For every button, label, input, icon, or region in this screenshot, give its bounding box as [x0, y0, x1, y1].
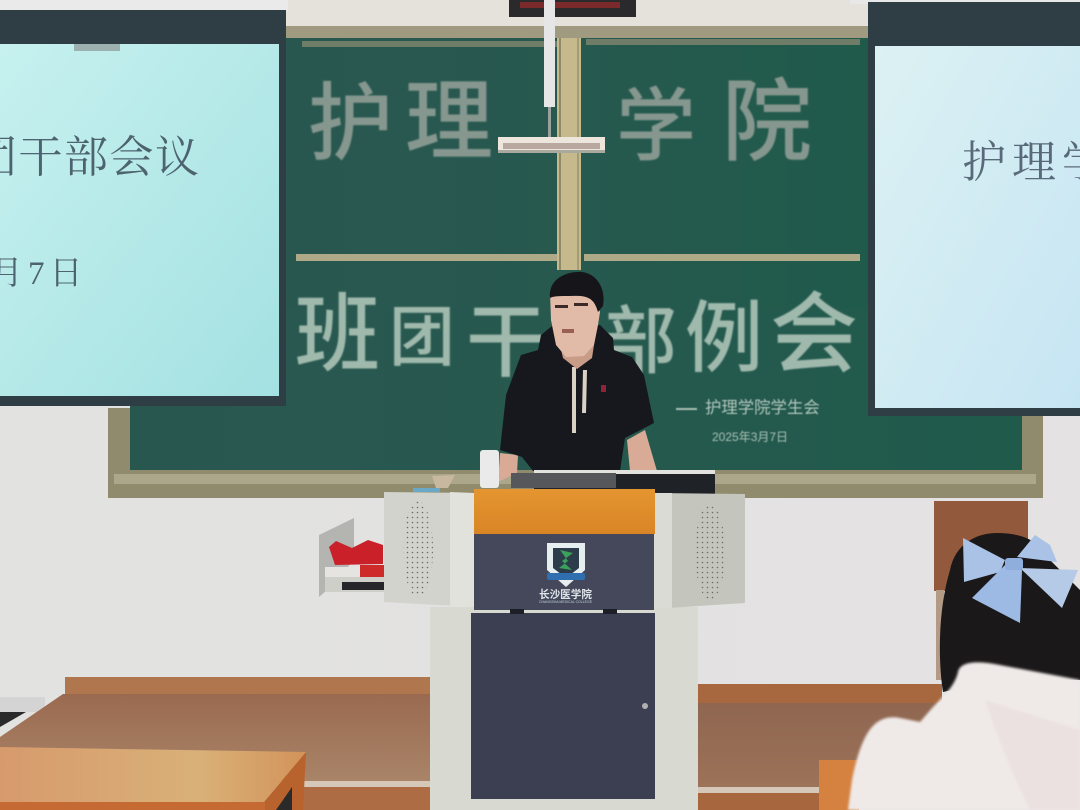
- audience student: [848, 533, 1080, 810]
- chalk heading: class cadre meeting: 例: [685, 294, 763, 382]
- chalk signature: 护理学院学生会: [705, 399, 820, 417]
- chalk heading: class cadre meeting: [295, 285, 858, 387]
- presenter hoodie: [500, 325, 654, 471]
- presenter hair: [550, 272, 604, 312]
- lectern: [384, 489, 745, 810]
- chalk heading: class cadre meeting: 部: [603, 300, 677, 383]
- presenter face: [550, 288, 600, 357]
- chalk heading: nursing college: 学: [616, 82, 696, 171]
- presenter: [498, 272, 657, 482]
- blackboard lower frame: [108, 408, 1043, 498]
- lectern navy panel: [474, 534, 654, 614]
- chalk date: 2025年3月7日: [712, 430, 788, 444]
- presenter forearms: [498, 430, 657, 482]
- chalk heading: class cadre meeting: 干: [466, 298, 546, 387]
- skirting wood: [65, 677, 942, 703]
- monitor: [511, 470, 715, 494]
- fleece pink tint: [985, 700, 1080, 810]
- chalk heading: class cadre meeting: 团: [389, 300, 455, 374]
- water bottle: [480, 450, 499, 488]
- blackboard: [130, 38, 1022, 470]
- chalk heading: class cadre meeting: 班: [295, 288, 380, 383]
- presenter neck: [560, 345, 594, 369]
- lectern door: [471, 613, 655, 799]
- presenter eyes and mouth: [555, 303, 588, 333]
- blackboard upper frame: [285, 26, 875, 38]
- chalk heading: nursing college: 护: [308, 77, 393, 172]
- ceiling projector mount: [498, 0, 605, 153]
- college badge: [547, 543, 585, 587]
- left projection screen: [0, 0, 288, 406]
- hoodie strings: [572, 367, 587, 433]
- foreground desk left: [0, 747, 306, 810]
- wooden panel right: [934, 501, 1028, 680]
- door handle: [642, 703, 648, 709]
- chalk heading: class cadre meeting: 会: [770, 285, 858, 384]
- digital clock: [509, 0, 636, 17]
- college name: 长沙医学院: [539, 588, 592, 601]
- stage floor: [0, 694, 938, 810]
- chalk heading: nursing college: [308, 72, 812, 173]
- student bow: [963, 535, 1078, 623]
- polo logo: [601, 385, 606, 392]
- lectern lower body: [430, 607, 698, 810]
- lectern left wing: [384, 492, 474, 607]
- college english name: CHANGSHA MEDICAL COLLEGE: [539, 599, 592, 604]
- lectern right wing: [653, 493, 745, 609]
- student fleece top: [848, 662, 1080, 810]
- wall base: [0, 697, 45, 727]
- lectern wood top: [474, 489, 655, 534]
- student hair: [940, 533, 1080, 692]
- chalk heading: nursing college: 理: [405, 72, 493, 171]
- open drawer: [319, 518, 384, 597]
- right projection screen: [850, 0, 1080, 416]
- speaker grille left: [403, 501, 433, 597]
- speaker grille right: [695, 504, 725, 600]
- foreground desk right: [819, 760, 859, 810]
- upper wall strip: [280, 0, 880, 27]
- chalk heading: nursing college: 院: [722, 73, 812, 173]
- items on lectern: [413, 475, 455, 492]
